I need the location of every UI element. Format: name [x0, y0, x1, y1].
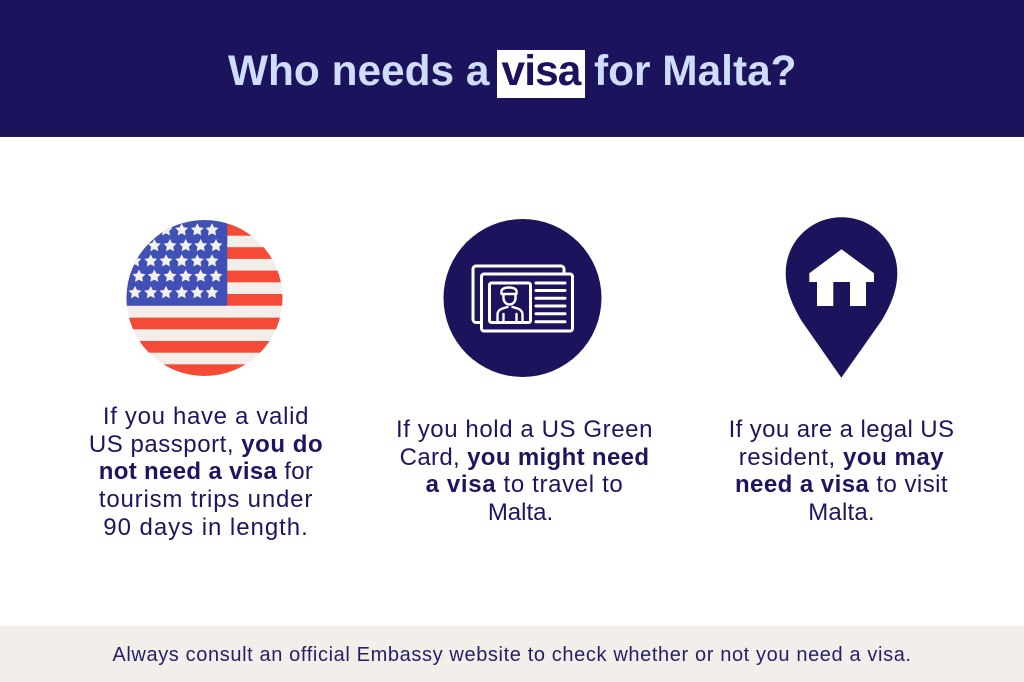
text block: legal resident: [729, 416, 954, 526]
icon: green card: [444, 219, 602, 377]
title: Who needs a: [228, 47, 489, 94]
footer note: Always consult an official Embassy website to check whether or not you need a visa.: [112, 644, 912, 666]
text block: legal resident: If you are a legal US: [729, 416, 954, 443]
text block: US passport: US passport, you do: [89, 431, 323, 458]
text block: legal resident: resident, you may: [739, 444, 944, 471]
icon: US flag: [126, 220, 282, 376]
text block: US passport: not need a visa for: [99, 458, 313, 485]
text block: green card: a visa to travel to: [426, 471, 623, 498]
text block: green card: Card, you might need: [400, 444, 649, 471]
header band: [0, 0, 1024, 137]
title: for Malta?: [594, 47, 797, 94]
icon: location pin with house: [786, 217, 898, 378]
title: visa: [502, 47, 580, 94]
footer band: [0, 626, 1024, 682]
text block: legal resident: need a visa to visit: [735, 471, 948, 498]
text block: legal resident: Malta.: [808, 499, 875, 526]
text block: green card: [396, 416, 653, 526]
text block: green card: Malta.: [488, 499, 553, 526]
text block: US passport: tourism trips under: [99, 486, 313, 513]
text block: US passport: If you have a valid: [103, 403, 309, 430]
text block: green card: If you hold a US Green: [396, 416, 653, 443]
text block: US passport: 90 days in length.: [103, 514, 309, 541]
title: [228, 47, 797, 98]
text block: US passport: [89, 403, 323, 541]
